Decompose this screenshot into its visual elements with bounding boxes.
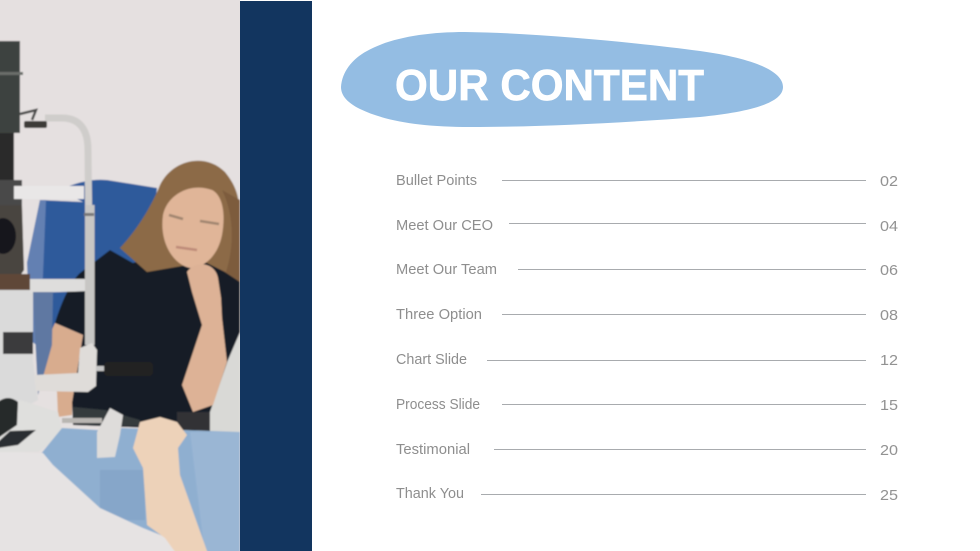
- heading: light blue blob with title: OUR CONTENT: [395, 61, 704, 110]
- chair: [27, 180, 157, 348]
- patient shoulder: [0, 452, 175, 551]
- jeans: [73, 407, 140, 426]
- row: Three Option: 08: [880, 307, 898, 324]
- navy vertical band: [240, 1, 312, 551]
- row: Chart Slide: [396, 351, 898, 369]
- row: Three Option: Three Option: [396, 306, 482, 323]
- row: Process Slide: [396, 396, 898, 414]
- row: Meet Our Team: 06: [880, 262, 898, 279]
- table: [42, 427, 234, 539]
- row: Thank You: [396, 485, 898, 504]
- hair: [120, 161, 240, 282]
- row: Thank You: Thank You: [396, 485, 464, 502]
- row: Thank You: 25: [880, 487, 898, 504]
- row: Testimonial: [396, 441, 898, 459]
- row: Process Slide: 15: [880, 397, 898, 414]
- row: Bullet Points: Bullet Points: [396, 172, 477, 189]
- white block: [97, 408, 123, 458]
- heading: light blue blob with title: [341, 32, 783, 127]
- row: Chart Slide: 12: [880, 352, 898, 369]
- row: Process Slide: Process Slide: [396, 396, 480, 413]
- photo: patient at an eye examination: [0, 0, 245, 551]
- row: Chart Slide: Chart Slide: [396, 351, 467, 368]
- row: Meet Our Team: Meet Our Team: [396, 261, 497, 278]
- row: Meet Our Team: [396, 261, 898, 279]
- arms: [40, 323, 83, 417]
- chin rest pole and lamp arm: [45, 114, 94, 206]
- row: Bullet Points: [396, 172, 898, 190]
- row: Testimonial: 20: [880, 442, 898, 459]
- slit lamp machine: [0, 41, 20, 133]
- shirt: [55, 250, 240, 430]
- row: Testimonial: Testimonial: [396, 441, 470, 458]
- row: Three Option: [396, 306, 898, 324]
- face: [162, 188, 224, 268]
- row: Bullet Points: 02: [880, 173, 898, 190]
- patient arm and hand: [133, 417, 209, 551]
- row: Meet Our CEO: 04: [880, 218, 898, 235]
- chin rest bracket and handle: [34, 343, 97, 392]
- contents list: [396, 172, 898, 504]
- row: Meet Our CEO: Meet Our CEO: [396, 217, 493, 234]
- row: Meet Our CEO: [396, 217, 898, 235]
